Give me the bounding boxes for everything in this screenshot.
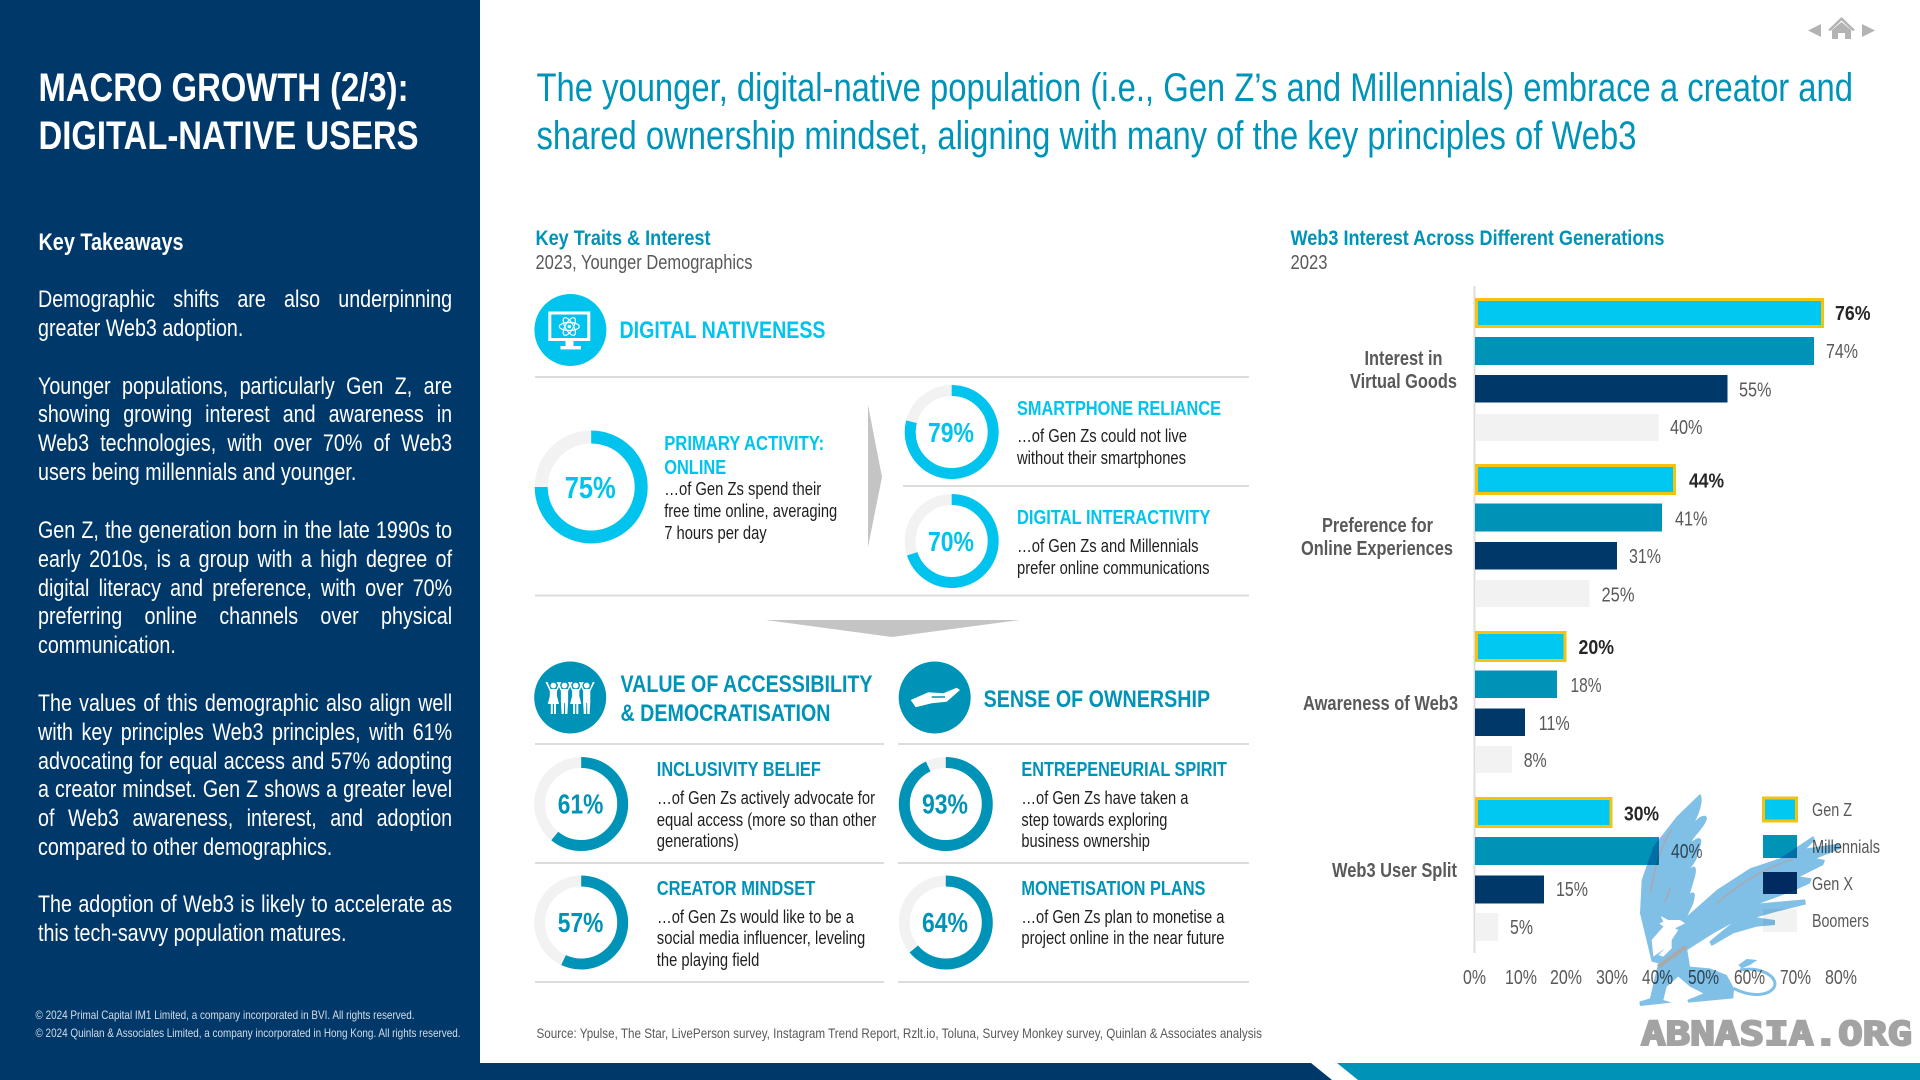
section heading: key traits: Key Traits & Interest [536, 226, 710, 250]
stat: inclusivity belief 61%: …of Gen Zs actively advocate for [657, 787, 875, 808]
x axis labels: 10% [1505, 967, 1537, 989]
legend: Boomers [1812, 911, 1869, 931]
stat: inclusivity belief 61%: generations) [657, 830, 739, 851]
heading: digital nativeness: DIGITAL NATIVENESS [620, 317, 826, 344]
stat: monetisation plans 64% [904, 878, 1225, 964]
paragraph: Gen Z definition: preferring online channels over physical [38, 603, 452, 630]
stat: entrepreneurial spirit 93% [904, 759, 1227, 851]
stat: inclusivity belief 61%: 61% [558, 788, 603, 820]
paragraph: Gen Z definition: early 2010s, is a group with a high degree of [38, 546, 452, 573]
main headline: shared ownership mindset, aligning with many of the key principles of Web3 [536, 114, 1636, 158]
heading: value of accessibility: & DEMOCRATISATION [620, 700, 830, 727]
heading: value of accessibility [620, 671, 872, 727]
bar group: awareness of web3 [1303, 632, 1614, 773]
stat: monetisation plans 64%: 64% [922, 907, 968, 938]
x axis labels: 80% [1825, 967, 1857, 989]
bar group: interest in virtual goods: 76% [1835, 302, 1870, 325]
section heading: web3 interest: Web3 Interest Across Different Generations [1290, 226, 1665, 250]
sidebar title [38, 66, 418, 158]
stat: smartphone reliance 79%: SMARTPHONE RELIANCE [1017, 398, 1221, 420]
stat: inclusivity belief 61%: equal access (more so than other [657, 809, 876, 830]
paragraph: values of demographic: compared to other demographics. [38, 834, 332, 861]
bar group: web3 user split: 40% [1671, 841, 1703, 863]
arrow: right chevron [868, 405, 882, 547]
bar group: interest in virtual goods: Virtual Goods [1350, 371, 1457, 393]
stat: creator mindset 57% [540, 878, 865, 970]
main headline [536, 66, 1853, 158]
paragraph: values of demographic [38, 690, 452, 861]
stat: entrepreneurial spirit 93%: 93% [922, 788, 968, 820]
stat: monetisation plans 64%: project online in the near future [1021, 927, 1224, 948]
bar group: awareness of web3: 11% [1539, 713, 1570, 735]
bar group: web3 user split: 30% [1624, 802, 1659, 826]
x axis labels: 70% [1780, 967, 1811, 989]
paragraph: values of demographic: advocating for equal access and 57% adopting [38, 748, 452, 775]
panel: sense of ownership [898, 662, 1249, 982]
icon: monitor with atom [534, 294, 606, 366]
stat: entrepreneurial spirit 93%: step towards exploring [1021, 809, 1167, 830]
bar group: awareness of web3: 18% [1570, 675, 1602, 697]
bar group: preference for online experiences: 44% [1689, 470, 1724, 492]
paragraph: demographic shifts: greater Web3 adoption. [38, 315, 243, 342]
stat: primary activity 75%: …of Gen Zs spend their [664, 478, 821, 499]
stat: creator mindset 57%: …of Gen Zs would like to be a [657, 906, 854, 927]
watermark: ABNASIA.ORG: ABNASIA.ORG [1641, 1014, 1912, 1053]
x axis labels: 30% [1596, 967, 1628, 989]
icon: open hand [899, 662, 971, 734]
paragraph: younger populations [38, 373, 452, 486]
panel: accessibility and democratisation [534, 662, 884, 982]
paragraph: Gen Z definition [38, 517, 452, 659]
heading: sense of ownership: SENSE OF OWNERSHIP [984, 686, 1210, 713]
paragraph: demographic shifts: Demographic shifts are also underpinning [38, 286, 452, 313]
bar group: preference for online experiences [1301, 466, 1724, 607]
stat: digital interactivity 70%: DIGITAL INTERACTIVITY [1017, 507, 1211, 529]
paragraph: younger populations: Younger populations, particularly Gen Z, are [38, 373, 452, 400]
stat: primary activity 75% [541, 433, 837, 543]
copyright notices [36, 1008, 460, 1040]
bar group: interest in virtual goods [1350, 300, 1870, 441]
icon: people with raised arms [534, 662, 606, 734]
x axis labels [1463, 967, 1857, 989]
stat: digital interactivity 70%: 70% [928, 526, 974, 557]
stat: primary activity 75%: 75% [565, 470, 616, 505]
stat: creator mindset 57%: the playing field [657, 949, 759, 970]
paragraph: Gen Z definition: communication. [38, 632, 176, 659]
stat: inclusivity belief 61%: INCLUSIVITY BELIEF [657, 759, 821, 781]
arrow: down chevron [766, 620, 1019, 637]
section heading: key traits [536, 226, 752, 274]
paragraph: values of demographic: The values of this demographic also align well [38, 690, 452, 717]
navigation icons [1808, 17, 1875, 39]
paragraph: adoption outlook [38, 891, 452, 947]
bar group: preference for online experiences: Online Experiences [1301, 538, 1453, 560]
stat: creator mindset 57%: social media influencer, leveling [657, 927, 865, 948]
bar group: preference for online experiences: 31% [1629, 546, 1661, 568]
legend [1763, 798, 1880, 932]
copyright notices: © 2024 Primal Capital IM1 Limited, a company incorporated in BVI. All rights reserved. [36, 1008, 414, 1022]
paragraph: younger populations: users being millennials and younger. [38, 459, 356, 486]
section heading: web3 interest: 2023 [1290, 252, 1328, 274]
panel: left key takeaways sidebar [0, 0, 480, 1080]
paragraph: Gen Z definition: digital literacy and preference, with over 70% [38, 575, 452, 602]
stat: entrepreneurial spirit 93%: business ownership [1021, 830, 1150, 851]
x axis labels: 60% [1734, 967, 1765, 989]
bar group: web3 user split: 15% [1556, 879, 1588, 901]
stat: smartphone reliance 79% [910, 390, 1221, 474]
paragraph: values of demographic: a creator mindset. Gen Z shows a greater level [38, 776, 452, 803]
stat: primary activity 75%: free time online, averaging [664, 500, 837, 521]
stat: digital interactivity 70%: …of Gen Zs and Millennials [1017, 535, 1198, 556]
paragraph: younger populations: Web3 technologies, with over 70% of Web3 [38, 430, 452, 457]
section heading: web3 interest [1290, 226, 1665, 274]
bar group: preference for online experiences: 25% [1602, 584, 1635, 606]
bar group: preference for online experiences: Preference for [1322, 515, 1433, 537]
paragraph: demographic shifts [38, 286, 452, 342]
stat: creator mindset 57%: CREATOR MINDSET [657, 878, 815, 900]
x axis labels: 50% [1688, 967, 1719, 989]
legend: Gen Z [1812, 800, 1852, 820]
bar group: web3 user split [1332, 798, 1703, 941]
bar group: interest in virtual goods: Interest in [1364, 348, 1442, 370]
bar group: awareness of web3: Awareness of Web3 [1303, 693, 1458, 715]
bar group: interest in virtual goods: 74% [1826, 341, 1858, 363]
stat: primary activity 75%: 7 hours per day [664, 522, 767, 543]
heading: value of accessibility: VALUE OF ACCESSIBILITY [620, 671, 872, 698]
stat: smartphone reliance 79%: …of Gen Zs could not live [1017, 425, 1187, 446]
bar group: awareness of web3: 20% [1578, 636, 1614, 659]
bar group: interest in virtual goods: 40% [1670, 417, 1703, 439]
stat: monetisation plans 64%: …of Gen Zs plan to monetise a [1021, 906, 1225, 927]
bar group: web3 user split: 5% [1510, 917, 1533, 939]
x axis labels: 20% [1550, 967, 1582, 989]
bar group: interest in virtual goods: 55% [1739, 380, 1772, 402]
bar group: awareness of web3: 8% [1524, 750, 1547, 772]
panel: digital nativeness [534, 294, 1249, 596]
x axis labels: 0% [1463, 967, 1486, 989]
paragraph: Gen Z definition: Gen Z, the generation born in the late 1990s to [38, 517, 452, 544]
sidebar title: MACRO GROWTH (2/3): [38, 66, 408, 110]
paragraph: younger populations: showing growing interest and awareness in [38, 401, 452, 428]
stat: primary activity 75%: PRIMARY ACTIVITY: [664, 433, 824, 455]
paragraph: adoption outlook: this tech-savvy population matures. [38, 920, 346, 947]
stat: smartphone reliance 79%: 79% [928, 417, 974, 448]
x axis labels: 40% [1642, 967, 1673, 989]
paragraph: adoption outlook: The adoption of Web3 is likely to accelerate as [38, 891, 452, 918]
paragraph: values of demographic: with key principles Web3 principles, with 61% [38, 719, 452, 746]
paragraph: values of demographic: of Web3 awareness, interest, and adoption [38, 805, 452, 832]
bottom band [0, 1063, 1920, 1080]
section heading: key traits: 2023, Younger Demographics [536, 252, 752, 274]
sidebar title: DIGITAL-NATIVE USERS [38, 114, 418, 158]
bar group: preference for online experiences: 41% [1675, 508, 1708, 530]
stat: creator mindset 57%: 57% [558, 907, 603, 938]
stat: digital interactivity 70% [910, 500, 1211, 582]
stat: primary activity 75%: ONLINE [664, 457, 726, 479]
stat: entrepreneurial spirit 93%: ENTREPENEURIAL SPIRIT [1021, 759, 1227, 781]
legend: Millennials [1812, 837, 1880, 857]
stat: inclusivity belief 61% [540, 759, 876, 851]
stat: digital interactivity 70%: prefer online communications [1017, 557, 1210, 578]
heading: key takeaways: Key Takeaways [38, 229, 184, 256]
stat: monetisation plans 64%: MONETISATION PLANS [1021, 878, 1205, 900]
stat: smartphone reliance 79%: without their smartphones [1016, 447, 1186, 468]
bar chart: web3 interest [1301, 286, 1870, 989]
copyright notices: © 2024 Quinlan & Associates Limited, a company incorporated in Hong Kong. All rights reserved. [36, 1026, 460, 1040]
stat: entrepreneurial spirit 93%: …of Gen Zs have taken a [1021, 787, 1189, 808]
legend: Gen X [1812, 874, 1853, 894]
bar group: web3 user split: Web3 User Split [1332, 860, 1457, 882]
watermark: griffin [1639, 794, 1842, 1006]
source note: Source: Ypulse, The Star, LivePerson survey, Instagram Trend Report, Rzlt.io, Toluna, Survey Monkey survey, Quinlan & Associates analysis [536, 1025, 1262, 1041]
